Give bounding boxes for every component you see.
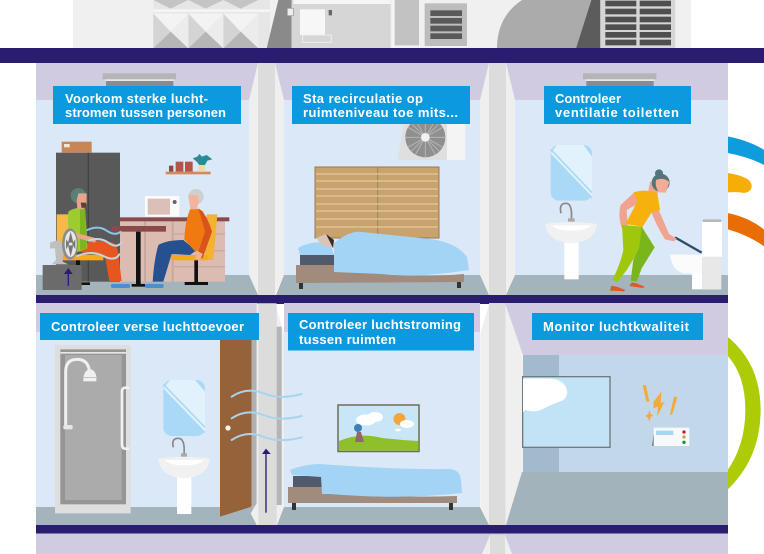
- outdoor AC unit: [398, 117, 465, 160]
- column between rooms 5 and 6: [480, 303, 523, 525]
- label: room 1: Voorkom sterke lucht-: [65, 91, 208, 106]
- label: room 3: ventilatie toiletten: [555, 105, 679, 120]
- man's chair: [57, 214, 103, 285]
- label: room 4: Controleer verse luchttoevoer: [51, 319, 244, 334]
- fan: [50, 228, 78, 264]
- dark duct wedge: [267, 0, 292, 48]
- headboard: [315, 167, 439, 238]
- label: room 6: [532, 313, 703, 340]
- column between rooms 4 and 5: [251, 303, 284, 525]
- woman cleaning: [610, 169, 702, 291]
- room 4: badkamer: [36, 303, 257, 525]
- air flow waves: [77, 228, 122, 259]
- box with up arrow: [43, 265, 82, 290]
- up arrow in shaft: [262, 449, 271, 513]
- top floor: technical room: [73, 0, 691, 48]
- label: room 5: Controleer luchtstroming: [299, 317, 461, 332]
- vent panel large: [600, 0, 675, 48]
- label: room 1: stromen tussen personen: [65, 105, 226, 120]
- microwave: [145, 196, 179, 217]
- woman's chair: [171, 214, 217, 285]
- mirror: [551, 145, 592, 201]
- triangle pattern wall: [153, 0, 270, 48]
- label: room 4: [40, 313, 259, 340]
- painting: [338, 405, 419, 452]
- wall shelf: [166, 154, 212, 174]
- air flow waves through wall: [232, 391, 302, 440]
- cabinet with box: [56, 142, 120, 282]
- label: room 2: Sta recirculatie op: [303, 91, 423, 106]
- bed: [288, 464, 462, 510]
- table: [112, 226, 166, 287]
- shower: [55, 345, 131, 513]
- column between rooms 1 and 2: [249, 63, 284, 295]
- ceiling vent: [583, 73, 656, 86]
- sink: [158, 438, 210, 514]
- bottom floor band: [36, 525, 728, 534]
- curved duct: [497, 0, 600, 48]
- label: room 2: [292, 86, 470, 124]
- elderly woman: [145, 189, 212, 288]
- middle floor band: [36, 295, 728, 304]
- label: room 1: [53, 86, 241, 124]
- decorative arcs: wifi signal: [725, 136, 764, 247]
- bed: [296, 232, 469, 289]
- label: room 2: ruimteniveau toe mits...: [303, 105, 458, 120]
- room 3: toilet: [506, 63, 728, 295]
- grey unit with window: [287, 0, 391, 48]
- room 5: slaapkamer: [277, 303, 489, 525]
- label: room 6: Monitor luchtkwaliteit: [543, 319, 690, 334]
- label: room 3: [544, 86, 691, 124]
- label: room 5: [288, 313, 474, 350]
- lower floor ceiling: [36, 534, 728, 554]
- label: room 5: tussen ruimten: [299, 332, 396, 347]
- room 1: personen: [36, 63, 258, 295]
- mirror: [163, 380, 205, 436]
- open door: [220, 340, 257, 517]
- kitchen counter: [120, 217, 229, 282]
- sink: [545, 203, 597, 279]
- label: room 3: Controleer: [555, 91, 621, 106]
- toilet: [670, 219, 722, 289]
- room 6: monitor: [505, 303, 728, 525]
- man: [68, 188, 130, 288]
- ceiling vent: [103, 73, 176, 86]
- decorative arc: green ring: [725, 335, 761, 492]
- window with cloud: [523, 377, 610, 447]
- column between rooms 2 and 3: [480, 63, 515, 295]
- roof band: [0, 48, 764, 63]
- vent panel small: [392, 0, 467, 48]
- air quality monitor with alert: [643, 385, 689, 446]
- room 2: slaapkamer: [275, 63, 489, 295]
